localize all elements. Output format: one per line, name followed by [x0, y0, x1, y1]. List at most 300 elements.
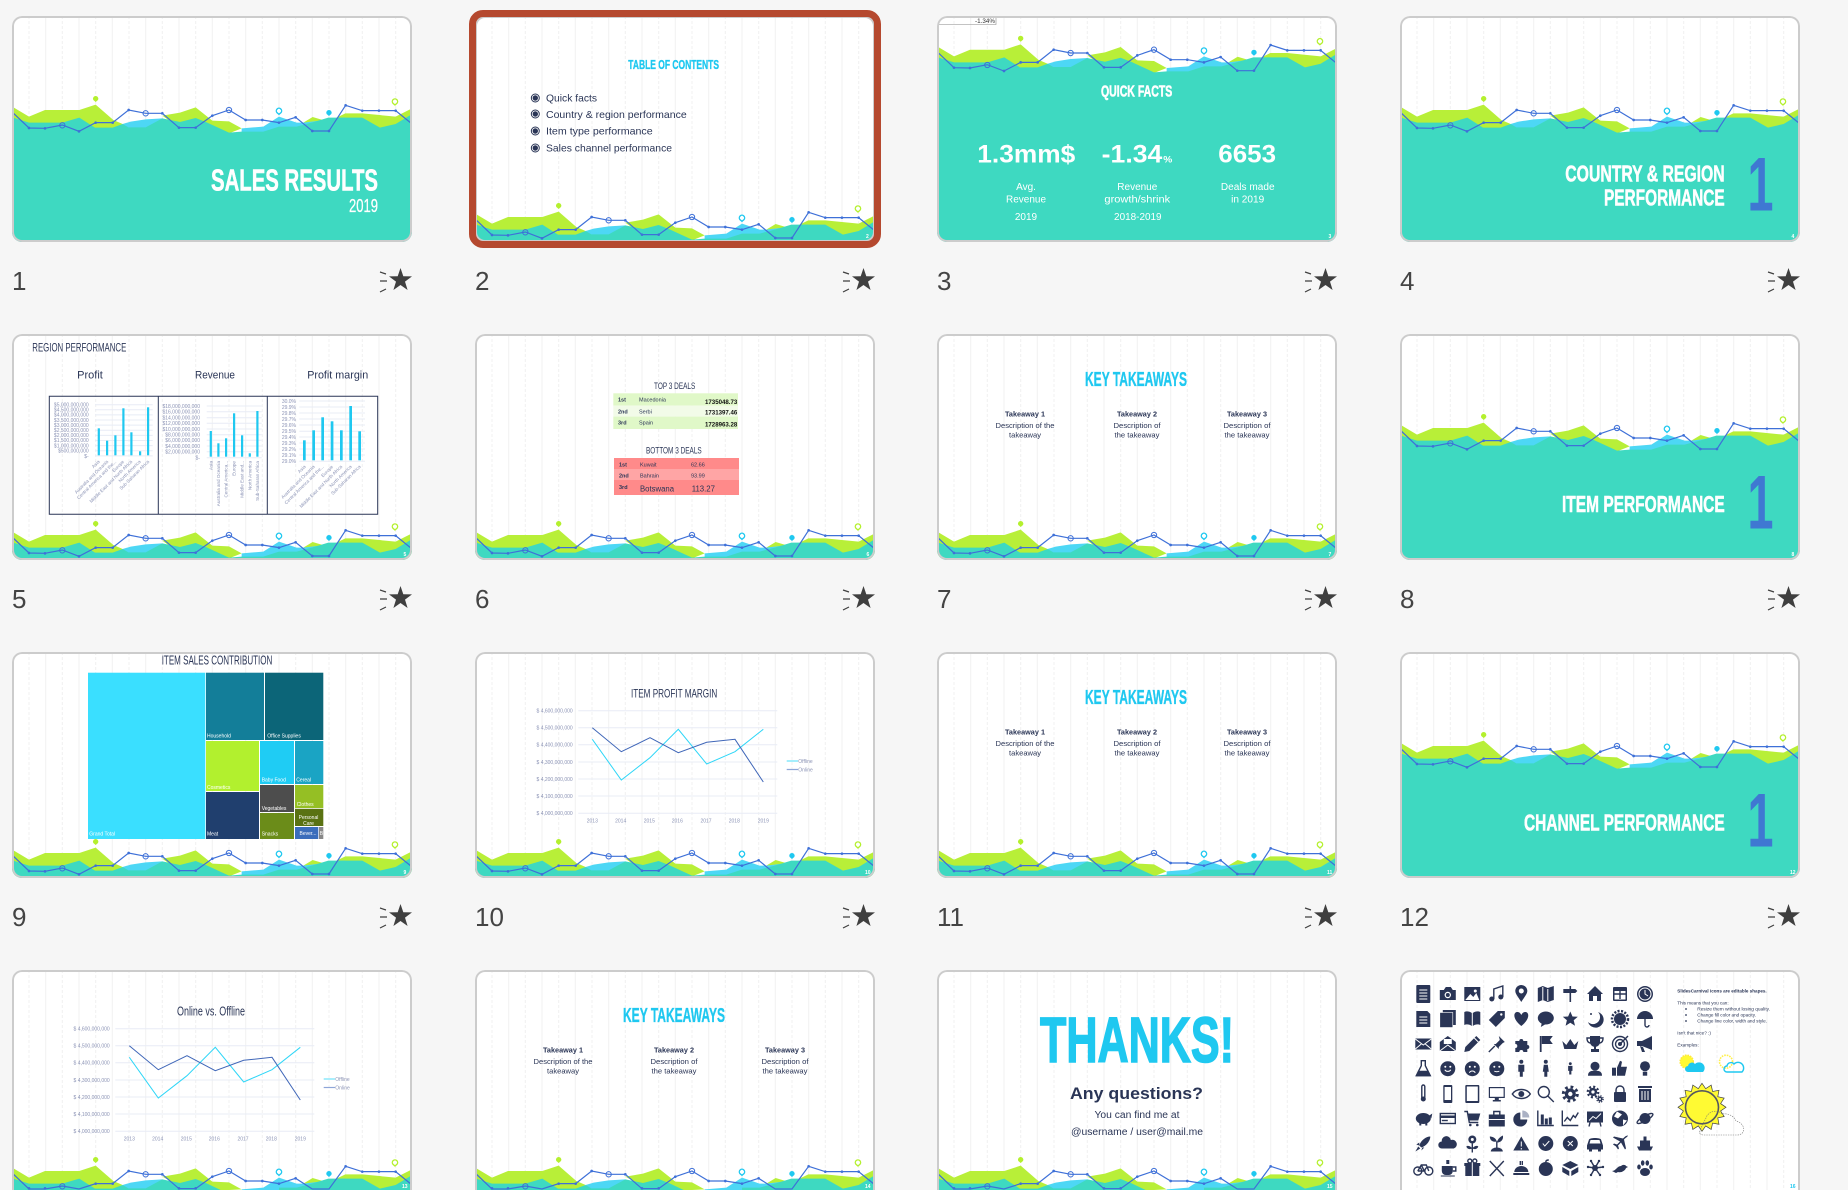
icon: documents [1440, 1010, 1456, 1028]
page number: 16 [1790, 1184, 1796, 1190]
stat: revenue growth [1102, 141, 1172, 223]
bar chart: revenue: $10,000,000,000 [162, 427, 200, 433]
icon: star 7 [1304, 586, 1337, 610]
slide 1: title slide [12, 16, 412, 242]
icon: open mail [1440, 1036, 1456, 1051]
table: top 3 deals: 2nd [618, 410, 628, 416]
takeaway 2 [1114, 727, 1161, 758]
line chart: offline vs online [537, 708, 813, 824]
icon: globe [1612, 1110, 1628, 1126]
icon grid [1414, 985, 1654, 1176]
bar chart: profit margin: 29.0% [282, 459, 297, 465]
takeaway 1 [534, 1045, 592, 1076]
wave chart footer [473, 521, 876, 825]
icon: cart [1464, 1112, 1480, 1126]
bar chart: profit: North America [118, 459, 142, 483]
stat: revenue growth: growth/shrink [1104, 195, 1171, 206]
takeaway 1 [996, 409, 1054, 440]
icon: child [1568, 1062, 1572, 1074]
line chart: offline vs online: $ 4,400,000,000 [74, 1060, 110, 1066]
takeaway 3 [1224, 727, 1271, 758]
takeaway 1: Takeaway 1 [1005, 727, 1045, 736]
line chart: offline vs online: 2019 [295, 1136, 306, 1142]
icon: star 5 [380, 586, 412, 610]
icon: tag [1489, 1011, 1505, 1027]
bar chart: profit margin: 29.1% [282, 453, 297, 459]
icon: calendar [1613, 987, 1627, 1001]
icon: magnifier [1538, 1086, 1554, 1102]
bar chart: profit [54, 402, 153, 504]
bar chart: profit: $3,000,000,000 [54, 423, 89, 429]
table: top 3 deals: Spain [639, 421, 653, 427]
column heading: profit: Profit [77, 369, 103, 381]
wave chart footer [935, 521, 1338, 825]
contents list: Quick facts [546, 93, 597, 105]
treemap: Grand Total [89, 832, 115, 838]
icon: map [1538, 986, 1554, 1002]
takeaway 3 [1224, 409, 1271, 440]
bar chart: revenue: $4,000,000,000 [165, 444, 200, 450]
page number: 8 [1792, 552, 1794, 558]
bar chart: profit margin: Europe [320, 464, 335, 478]
icon: sun badge [1612, 1011, 1628, 1027]
table: top 3 deals: Serbi [639, 410, 652, 416]
icon: target [1612, 1036, 1628, 1052]
editable icons note: Isn't that nice? :) [1677, 1031, 1711, 1036]
line chart: offline vs online: $ 4,000,000,000 [537, 811, 573, 817]
takeaway 1: Takeaway 1 [1005, 409, 1045, 418]
heading: key takeaways: KEY TAKEAWAYS [1085, 687, 1187, 709]
treemap: Household [207, 734, 231, 740]
contact text: @username / user@mail.me [1071, 1127, 1203, 1138]
icon: phone [1443, 1085, 1452, 1103]
bar chart: revenue: $8,000,000,000 [165, 432, 200, 438]
icon: trash [1638, 1086, 1652, 1102]
takeaway 3: the takeaway [762, 1066, 808, 1076]
bar chart: profit: Europe [111, 459, 126, 473]
icon: speech bubble [1538, 1012, 1554, 1027]
takeaway 1: Description of the [534, 1057, 592, 1066]
line chart: offline vs online: 2016 [209, 1136, 220, 1142]
slide number label 10: 10 [475, 902, 504, 932]
editable icons note: Change fill color and opacity. [1697, 1013, 1756, 1018]
takeaway 3: the takeaway [1224, 748, 1270, 758]
heading: quick facts: QUICK FACTS [1101, 84, 1173, 101]
wave chart background [10, 96, 413, 400]
table: bottom 3 deals: 113.27 [692, 485, 716, 494]
stat: revenue growth: -1.34 [1102, 141, 1162, 169]
bar chart: profit: Australia and Oceania [74, 459, 110, 495]
icon: light bulb [1640, 1061, 1650, 1076]
stat: average revenue: 1.3mm$ [977, 141, 1075, 169]
bar chart: profit: Central America and the... [76, 459, 117, 500]
editable icons note [1677, 989, 1770, 1048]
line chart: offline vs online: 2017 [237, 1136, 249, 1142]
table: top 3 deals: 1735048.73 [705, 400, 738, 406]
takeaway 3 [762, 1045, 809, 1076]
icon: star 10 [842, 904, 875, 928]
page number: 3 [1328, 234, 1332, 240]
icon: pie chart [1513, 1110, 1529, 1126]
icon: rocket [1415, 1136, 1430, 1152]
heading: item profit margin: ITEM PROFIT MARGIN [631, 687, 717, 701]
slide number label 4: 4 [1400, 266, 1414, 296]
icon: crown [1562, 1039, 1578, 1049]
section title: PERFORMANCE [1604, 185, 1725, 211]
takeaway 3: Takeaway 3 [1227, 409, 1267, 418]
bar chart: revenue: $2,000,000,000 [165, 450, 200, 456]
bar chart: profit: $2,500,000,000 [54, 428, 89, 434]
treemap: Cereal [296, 778, 311, 784]
icon: star 11 [1304, 904, 1337, 928]
editable icons note: This means that you can: [1677, 1000, 1729, 1005]
line chart: offline vs online [74, 1026, 350, 1142]
slide 4: country and region section [1400, 16, 1800, 242]
line chart: offline vs online: 2014 [615, 818, 626, 824]
icon: neutral face [1489, 1061, 1504, 1076]
bar chart: profit: $2,000,000,000 [54, 433, 89, 439]
line chart: offline vs online: $ 4,500,000,000 [537, 726, 573, 732]
bar chart: profit: $5,000,000,000 [54, 402, 89, 408]
icon: cross [1563, 1136, 1578, 1151]
table: bottom 3 deals: Kuwait [640, 463, 657, 469]
icon: star 8 [1768, 586, 1800, 610]
slide 13: online vs offline [12, 970, 412, 1190]
treemap: Vegetables [262, 806, 287, 812]
bar chart: profit: $1,000,000,000 [54, 443, 89, 449]
table: bottom 3 deals: 93.99 [691, 474, 705, 480]
icon: heart [1514, 1012, 1528, 1026]
line chart: offline vs online: $ 4,300,000,000 [74, 1078, 110, 1084]
line chart: offline vs online: $ 4,200,000,000 [537, 777, 573, 783]
stray cell widget [938, 18, 996, 25]
table: bottom 3 deals: Bahrain [640, 474, 659, 480]
stat: deals made: in 2019 [1231, 195, 1265, 206]
icon: tablet [1465, 1085, 1479, 1103]
slide 9: item sales contribution [12, 652, 412, 878]
icon: coffee cup [1441, 1160, 1456, 1176]
contents list [531, 93, 687, 154]
icon: star 12 [1768, 904, 1800, 928]
wave chart footer [10, 839, 413, 1143]
page number: 15 [1327, 1184, 1333, 1190]
bar chart: revenue: Asia [208, 461, 214, 470]
section title [1565, 161, 1725, 211]
icon: flower [1466, 1136, 1478, 1152]
takeaway 1: Takeaway 1 [543, 1045, 583, 1054]
icon: star 2 [842, 268, 875, 292]
contact text: You can find me at [1094, 1110, 1180, 1121]
subtitle: year: 2019 [349, 196, 378, 216]
icon: clock [1637, 986, 1653, 1002]
takeaway 2 [1114, 409, 1161, 440]
bar chart: profit: Middle East and North Africa [89, 459, 134, 504]
section title: COUNTRY & REGION [1565, 161, 1725, 187]
bar chart: profit: $4,500,000,000 [54, 408, 89, 414]
takeaway 3: Description of [1224, 739, 1271, 748]
line chart: offline vs online: $ 4,100,000,000 [537, 794, 573, 800]
bar chart: profit margin: 29.6% [282, 423, 297, 429]
stat: deals made: 6653 [1218, 141, 1276, 169]
slide 2: table of contents [475, 16, 875, 242]
takeaway 2: Description of [1114, 739, 1161, 748]
icon: woman [1543, 1060, 1549, 1077]
bar chart: revenue: Europe [232, 461, 237, 476]
icon: camera [1440, 987, 1456, 1000]
slide number label 5: 5 [12, 584, 26, 614]
heading: online vs offline: Online vs. Offline [177, 1005, 245, 1019]
icon: presentation [1587, 1112, 1603, 1126]
icon: map pin [1515, 985, 1527, 1002]
column heading: profit margin: Profit margin [307, 369, 368, 381]
page number: 7 [1328, 552, 1332, 558]
table: top 3 deals: 1731397.46 [705, 411, 738, 417]
slide 14: key takeaways [475, 970, 875, 1190]
icon: gears [1588, 1087, 1603, 1102]
icon: image [1464, 987, 1480, 1001]
icon: sad face [1465, 1061, 1480, 1076]
slide number label 2: 2 [475, 266, 489, 296]
slide 10: item profit margin [475, 652, 875, 878]
icon: paw [1637, 1160, 1653, 1176]
heading: thanks: THANKS! [1040, 1004, 1234, 1076]
bar chart: profit: $1,500,000,000 [54, 438, 89, 444]
icon: thermometer [1421, 1085, 1426, 1102]
page number: 6 [866, 552, 870, 558]
section number: 1 [1748, 143, 1774, 228]
treemap: Personal [299, 815, 318, 821]
wave chart footer [10, 1157, 413, 1190]
table: bottom 3 deals: 1st [619, 463, 627, 469]
wave chart footer [473, 1157, 876, 1190]
bar chart: profit: $4,000,000,000 [54, 413, 89, 419]
icon: dish [1513, 1161, 1529, 1175]
heading: region performance: REGION PERFORMANCE [32, 341, 126, 355]
takeaway 3: Takeaway 3 [1227, 727, 1267, 736]
line chart: offline vs online: 2013 [124, 1136, 135, 1142]
line chart: offline vs online: $ 4,300,000,000 [537, 760, 573, 766]
treemap [88, 673, 324, 839]
treemap: Clothes [297, 802, 314, 808]
stat: deals made: Deals made [1221, 182, 1275, 193]
icon: bar chart [1538, 1110, 1554, 1126]
slide 16: icon sheet [1400, 970, 1800, 1190]
icon: notebook [1416, 985, 1430, 1003]
takeaway 1: takeaway [547, 1066, 579, 1076]
stat: average revenue: 2019 [1015, 212, 1038, 223]
page number: 9 [404, 870, 406, 876]
takeaway 2: Takeaway 2 [654, 1045, 694, 1054]
section number: 1 [1748, 461, 1774, 546]
takeaway 1: takeaway [1009, 430, 1041, 440]
bar chart: revenue: Middle East and... [240, 461, 245, 498]
wave chart background [1398, 732, 1801, 1036]
slide number label 6: 6 [475, 584, 489, 614]
wave chart footer [473, 839, 876, 1143]
slide 15: thanks [937, 970, 1337, 1190]
example: outlined sun and cloud [1720, 1055, 1744, 1072]
contents list: Country & region performance [546, 109, 687, 121]
line chart: offline vs online: 2014 [152, 1136, 163, 1142]
icon: cloud [1438, 1136, 1457, 1148]
stat: revenue growth: % [1163, 155, 1172, 165]
icon: envelope [1415, 1038, 1431, 1050]
line chart: offline vs online: Offline [335, 1077, 350, 1083]
line chart: offline vs online: 2013 [587, 818, 598, 824]
editable icons note: Change line color, width and style. [1697, 1019, 1767, 1024]
table: bottom 3 deals: 62.66 [691, 463, 705, 469]
page number: 2 [866, 234, 869, 240]
page number: 13 [402, 1184, 408, 1190]
takeaway 2: the takeaway [652, 1066, 697, 1076]
icon: gift [1464, 1159, 1480, 1176]
section number: 1 [1748, 779, 1774, 864]
icon: eye [1512, 1090, 1530, 1098]
bar chart: revenue: $18,000,000,000 [162, 404, 200, 410]
line chart: offline vs online: 2019 [758, 818, 769, 824]
table: bottom 3 deals: 3rd [619, 485, 628, 491]
icon: document [1416, 1011, 1430, 1027]
line chart: offline vs online: $ 4,600,000,000 [74, 1026, 110, 1032]
page number: 12 [1790, 870, 1796, 876]
bar chart: revenue: North America [247, 461, 252, 490]
slide number label 8: 8 [1400, 584, 1414, 614]
bar chart: profit: $- [84, 454, 89, 460]
wave chart background [935, 36, 1338, 340]
icon: check [1538, 1136, 1553, 1151]
bar chart: profit margin: 29.5% [282, 429, 297, 435]
icon: signpost [1563, 986, 1577, 1002]
stat: average revenue: Revenue [1006, 195, 1046, 206]
slide 7: key takeaways [937, 334, 1337, 560]
wave chart footer [935, 1157, 1338, 1190]
treemap: Cosmetics [207, 785, 231, 791]
icon: star 3 [1304, 268, 1337, 292]
takeaway 2: Takeaway 2 [1117, 409, 1157, 418]
table: bottom 3 deals: Botswana [640, 485, 675, 494]
treemap: B [320, 831, 324, 837]
bar chart: revenue [162, 404, 262, 506]
icon: moon [1588, 1012, 1604, 1028]
icon: box [1562, 1161, 1578, 1176]
slide 12: channel performance section [1400, 652, 1800, 878]
icon: warning [1513, 1136, 1529, 1150]
bar chart: revenue: $12,000,000,000 [162, 421, 200, 427]
bar chart: revenue: $6,000,000,000 [165, 438, 200, 444]
line chart: offline vs online: 2017 [700, 818, 712, 824]
treemap: Snacks [262, 832, 279, 838]
bar chart: revenue: $- [196, 456, 200, 462]
line chart: offline vs online: $ 4,400,000,000 [537, 742, 573, 748]
stat: average revenue: Avg. [1016, 182, 1036, 193]
bar chart: profit margin: 29.2% [282, 447, 297, 453]
line chart: offline vs online: 2018 [729, 818, 740, 824]
section title: ITEM PERFORMANCE [1562, 491, 1725, 517]
line chart: offline vs online: 2015 [644, 818, 655, 824]
icon: puzzle [1515, 1039, 1529, 1052]
takeaway 2: Description of [1114, 421, 1161, 430]
stat: revenue growth: 2018-2019 [1114, 212, 1162, 223]
bar chart: profit margin: 29.4% [282, 435, 297, 441]
takeaway 1: Description of the [996, 739, 1054, 748]
icon: network [1587, 1160, 1604, 1176]
takeaway 2: the takeaway [1114, 748, 1160, 758]
example: large sun with dashed cloud [1678, 1083, 1744, 1135]
icon: thumbs up [1612, 1061, 1627, 1076]
line chart: offline vs online: Online [335, 1086, 350, 1092]
wave chart footer [473, 203, 876, 507]
line chart: offline vs online: $ 4,200,000,000 [74, 1095, 110, 1101]
icon: home [1587, 986, 1603, 1001]
editable icons note: SlidesCarnival icons are editable shapes. [1677, 989, 1767, 994]
takeaway 3: Description of [1224, 421, 1271, 430]
icon: star 1 [380, 268, 412, 292]
takeaway 1: takeaway [1009, 748, 1041, 758]
icon: pencil [1464, 1036, 1480, 1052]
column heading: revenue: Revenue [195, 369, 235, 381]
icon: apple [1539, 1160, 1553, 1176]
page number: 14 [865, 1184, 871, 1190]
icon: bicycle [1414, 1165, 1433, 1175]
line chart: offline vs online: $ 4,500,000,000 [74, 1044, 110, 1050]
takeaway 1: Description of the [996, 421, 1054, 430]
slide number label 1: 1 [12, 266, 26, 296]
takeaway 3: the takeaway [1224, 430, 1270, 440]
bar chart: revenue: Sub-Saharan Africa [255, 461, 260, 501]
wave chart background [1398, 96, 1801, 400]
icon: plane [1613, 1136, 1628, 1150]
contents list: Sales channel performance [546, 142, 672, 154]
table: top 3 deals: 3rd [618, 421, 627, 427]
table: top 3 deals: 1728963.28 [705, 422, 738, 428]
bar chart: profit margin [280, 399, 365, 509]
bar chart: revenue: Australia and Oceania [216, 461, 221, 506]
page number: 4 [1792, 234, 1794, 240]
slide number label 12: 12 [1400, 902, 1429, 932]
icon: monitor [1489, 1087, 1505, 1102]
icon: pushpin [1489, 1036, 1505, 1052]
takeaway 2 [650, 1045, 698, 1076]
heading: key takeaways: KEY TAKEAWAYS [623, 1005, 725, 1027]
treemap: Care [303, 821, 314, 827]
icon: line chart [1562, 1110, 1578, 1126]
takeaway 3: Takeaway 3 [765, 1045, 805, 1054]
page number: 11 [1327, 870, 1333, 876]
icon: credit card [1440, 1114, 1456, 1124]
heading: top 3 deals: TOP 3 DEALS [654, 381, 695, 392]
bar chart: profit margin: 29.7% [282, 417, 297, 423]
table: bottom 3 deals [614, 458, 739, 495]
slide number label 9: 9 [12, 902, 26, 932]
line chart: offline vs online: $ 4,600,000,000 [537, 708, 573, 714]
icon: lock [1614, 1086, 1626, 1102]
icon: book [1464, 1011, 1480, 1026]
stat: average revenue [977, 141, 1075, 223]
wave chart background [1398, 414, 1801, 718]
stat: deals made [1218, 141, 1276, 206]
slide 11: key takeaways [937, 652, 1337, 878]
bar chart: profit margin: 29.9% [282, 405, 297, 411]
icon: music [1489, 986, 1503, 1002]
chart frame [49, 396, 378, 514]
icon: piggy bank [1416, 1113, 1432, 1126]
icon: gear [1563, 1087, 1577, 1101]
icon: bird [1612, 1165, 1628, 1173]
treemap: Baby Food [262, 778, 286, 784]
bar chart: profit margin: North America [329, 464, 353, 488]
line chart: offline vs online: $ 4,000,000,000 [74, 1129, 110, 1135]
heading: bottom 3 deals: BOTTOM 3 DEALS [646, 446, 702, 457]
